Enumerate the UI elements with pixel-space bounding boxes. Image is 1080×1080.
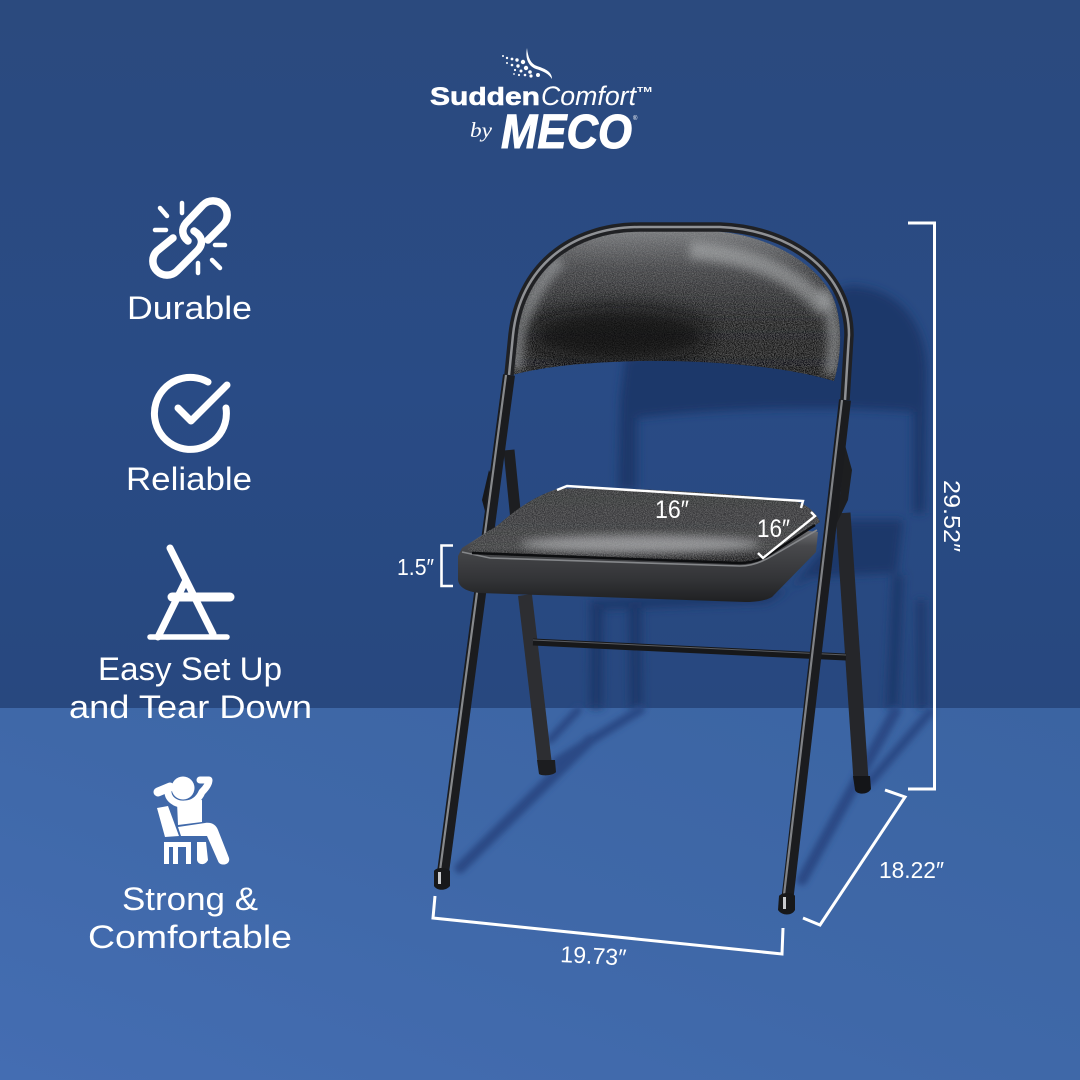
dimension: cushion thickness 1.5	[397, 546, 453, 586]
dimension: width 19.73	[433, 896, 783, 970]
logo: by	[470, 118, 493, 142]
label: Easy Set Up	[98, 651, 282, 687]
back cushion	[511, 231, 840, 381]
logo: Comfort	[541, 81, 637, 111]
label: Strong &	[122, 881, 258, 917]
logo wordmark: Sudden	[430, 83, 540, 111]
feature: Strong & Comfortable: Comfortable	[88, 919, 292, 955]
background wall	[0, 0, 1080, 708]
label: Reliable	[126, 461, 252, 497]
chair shadow on floor	[460, 710, 930, 880]
logo: MECO	[501, 106, 632, 159]
label: Durable	[127, 290, 252, 326]
dimension: seat width 16: 16″	[655, 496, 689, 524]
dimension: height 29.52: 29.52″	[939, 480, 965, 552]
dimension: depth 18.22: 18.22″	[879, 857, 944, 883]
chair shadow on wall	[590, 286, 927, 708]
dimension: width 19.73: 19.73″	[560, 941, 627, 970]
logo: ®	[633, 115, 638, 122]
seat pan	[458, 530, 818, 602]
cross bar	[533, 642, 846, 657]
back frame and front legs	[439, 227, 849, 902]
side hinges	[482, 470, 498, 515]
seat cushion	[468, 488, 820, 563]
rear feet	[537, 760, 556, 775]
rear legs	[509, 450, 861, 780]
logo swoosh and dots	[502, 48, 552, 79]
feature: Durable	[127, 201, 252, 326]
icon: folding chair	[150, 548, 230, 637]
logo: TM	[637, 87, 652, 94]
feature: Reliable	[126, 377, 252, 497]
background floor	[0, 708, 1080, 1080]
dimension: seat width 16	[557, 486, 803, 524]
dimension: cushion thickness 1.5: 1.5″	[397, 554, 434, 580]
dimension: seat depth 16: 16″	[757, 515, 790, 543]
dimension: depth 18.22	[803, 790, 944, 925]
front feet	[434, 868, 450, 890]
feature: Easy Set Up and Tear Down: and Tear Down	[69, 689, 312, 725]
dimension: seat depth 16	[757, 512, 815, 558]
feature: Strong & Comfortable	[88, 776, 292, 955]
seat lip	[462, 530, 817, 566]
chair	[434, 227, 871, 914]
logo	[430, 48, 652, 159]
icon: chain link	[153, 201, 227, 275]
feature: Easy Set Up and Tear Down	[69, 548, 312, 725]
dimension: height 29.52	[908, 223, 965, 789]
icon: check circle	[154, 377, 227, 449]
icon: seated person	[157, 776, 229, 865]
